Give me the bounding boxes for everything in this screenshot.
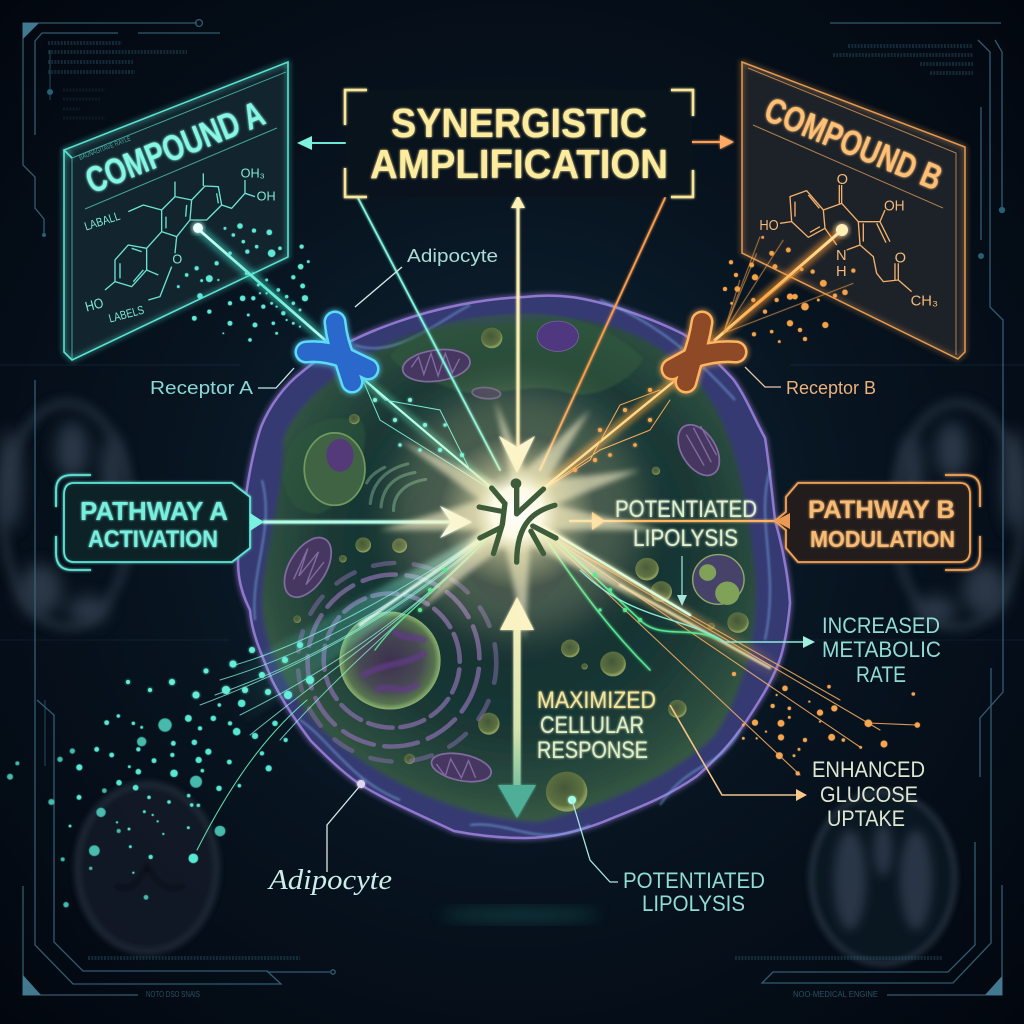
thin orange ray: [540, 198, 665, 470]
molecule A labels: O: [172, 252, 182, 266]
orange particles near compound B: [723, 236, 855, 343]
molecule B: [759, 172, 938, 309]
cyan particles upper band lower-left: [126, 642, 314, 699]
molecule B labels: CH₃: [911, 293, 938, 309]
lower-left spray: [197, 525, 500, 850]
left green lobe: [283, 419, 365, 514]
brain scan bottom right: [811, 792, 955, 964]
cell outer membrane: [238, 296, 790, 838]
rays to centre: [193, 135, 917, 850]
lower-right fan glow: [535, 525, 810, 700]
molecule B labels: OH: [884, 199, 905, 215]
label: receptor B: Receptor B: [786, 378, 876, 398]
callout: enhanced glucose uptake: ENHANCED: [812, 757, 925, 782]
purple vesicle: [537, 321, 578, 351]
lower-left fan glow: [235, 522, 505, 725]
brain scan bottom left: [77, 784, 217, 952]
label: maximized cellular response: MAXIMIZED: [537, 687, 656, 714]
callout: potentiated lipolysis bottom: LIPOLYSIS: [642, 891, 745, 916]
pathway A box: PATHWAY A: [80, 496, 228, 526]
label: receptor A: Receptor A: [150, 378, 253, 398]
arrow to compound B: [692, 135, 734, 149]
horizontal line to pathway B: [570, 512, 775, 530]
mitochondria: [275, 346, 728, 786]
cell: [238, 296, 790, 838]
large vesicle with inclusions: [693, 555, 744, 605]
callout: increased metabolic rate: INCREASED: [822, 613, 940, 638]
molecule A labels: OH: [257, 190, 276, 204]
pathway B box: MODULATION: [810, 526, 955, 552]
HUD micro text: NOTO DSO SNAIS: [146, 990, 200, 999]
vertical arrow from title: [499, 195, 535, 473]
callout: enhanced glucose uptake: [670, 705, 925, 831]
callout: enhanced glucose uptake: UPTAKE: [827, 806, 905, 831]
molecule A labels: LABALL: [83, 209, 122, 234]
synergy symbol: [479, 478, 556, 562]
title box: [346, 90, 692, 197]
small vesicles: [293, 328, 749, 812]
dim particles: [7, 718, 225, 907]
label: adipocyte top: [355, 246, 498, 307]
HUD micro text: NOO-MEDICAL ENGINE: [793, 990, 878, 999]
pathway A box: ACTIVATION: [88, 526, 218, 553]
panel A rules: [72, 72, 286, 360]
panel B border: [742, 62, 965, 359]
callout: enhanced glucose uptake: GLUCOSE: [820, 782, 918, 807]
label: receptor A: [150, 368, 294, 398]
molecule B labels: [759, 172, 938, 309]
cell cytoplasm: [262, 319, 756, 822]
golgi stack: [367, 464, 426, 510]
callout: increased metabolic rate: [580, 570, 941, 687]
molecule A labels: HO: [83, 294, 105, 315]
brain scan left: [0, 403, 131, 627]
title block: [345, 90, 693, 197]
molecule B labels: HO: [759, 218, 779, 234]
cyan particles near compound A: [177, 223, 310, 342]
panel B plate: [742, 62, 965, 359]
label: potentiated lipolysis in cell: [615, 496, 757, 606]
organelles: [275, 313, 749, 812]
beam B from compound to receptor: [715, 224, 848, 340]
membrane streaks: [254, 300, 770, 835]
beam A from compound to receptor: [193, 223, 325, 340]
brain scan right: [894, 403, 1024, 627]
heading: compound A: COMPOUND A: [80, 93, 270, 201]
pathway B box: PATHWAY B: [808, 496, 955, 524]
molecule A labels: OH₃: [241, 166, 265, 180]
pathway B box: [775, 475, 980, 570]
HUD micro text: [146, 990, 878, 999]
compound B panel: [742, 62, 965, 359]
burst star: [380, 400, 660, 640]
molecule A: [83, 166, 276, 326]
upper green lobe: [390, 313, 643, 395]
title text: SYNERGISTIC: [391, 100, 647, 146]
receptor to centre ray B: [535, 378, 678, 495]
receptor to centre ray A: [362, 378, 500, 495]
thin cyan ray: [358, 198, 500, 470]
vertical double arrow: [498, 597, 536, 818]
endoplasmic reticulum: [288, 556, 499, 765]
label: maximized cellular response: CELLULAR: [540, 712, 644, 739]
receptor B: [672, 322, 736, 382]
callout: increased metabolic rate: RATE: [856, 662, 906, 687]
panel A tiny labels: BAUNAGITAVE RAYLE: [78, 136, 132, 162]
compound A panel: [64, 62, 288, 360]
particles on receptor rays: [373, 388, 652, 622]
label: maximized cellular response: RESPONSE: [537, 737, 648, 764]
label: maximized cellular response: [537, 687, 656, 764]
molecule A labels: LABELS: [107, 303, 146, 326]
bright particles: [69, 700, 288, 874]
horizontal arrow A: [264, 506, 472, 538]
title brackets: [345, 90, 693, 197]
bottom glow: [440, 909, 600, 921]
lower-right green rays: [540, 525, 720, 670]
callout: potentiated lipolysis bottom: [568, 796, 765, 916]
heading: compound B: COMPOUND B: [759, 90, 948, 198]
cyan particles lower-left: [7, 700, 288, 907]
label: potentiated lipolysis in cell: POTENTIATED: [615, 496, 757, 523]
faint brain scans: [0, 403, 1024, 964]
label: receptor B: [745, 367, 876, 398]
arrow to compound A: [297, 136, 345, 150]
panel A plate: [64, 62, 288, 360]
green vesicle with purple core: [304, 433, 365, 505]
callout: adipocyte script: [267, 780, 392, 896]
label: adipocyte top: Adipocyte: [407, 246, 498, 266]
title block: AMPLIFICATION: [370, 141, 668, 187]
panel A border: [64, 62, 288, 360]
callout: adipocyte script: Adipocyte: [267, 864, 392, 896]
molecule A labels: [83, 166, 276, 326]
molecule B labels: H: [836, 264, 847, 280]
molecule B labels: N: [836, 248, 847, 264]
molecule B labels: O: [837, 172, 848, 188]
central burst: [380, 385, 660, 640]
receptor A: [306, 322, 368, 382]
lower-right orange spray: [540, 530, 917, 775]
panel B rules: [748, 68, 956, 355]
callout: potentiated lipolysis bottom: POTENTIATED: [623, 868, 765, 893]
nucleus: [339, 612, 441, 710]
molecule B labels: O: [895, 251, 906, 267]
orange particles lower-right: [732, 672, 920, 775]
label: potentiated lipolysis in cell: LIPOLYSIS: [633, 525, 738, 552]
pathway A box: [56, 475, 264, 570]
HUD nodes: [42, 89, 1005, 259]
callout: increased metabolic rate: METABOLIC: [822, 637, 941, 662]
